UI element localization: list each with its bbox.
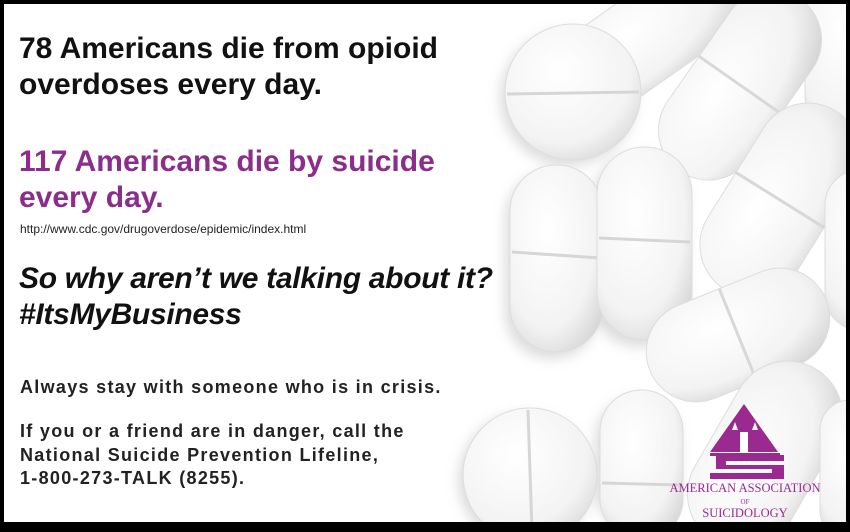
- vertical pill 1: [510, 165, 603, 352]
- pill behind logo: [667, 341, 850, 532]
- heading: opioid: 78 Americans die from opioid: [19, 32, 438, 65]
- round tablet top: [505, 24, 641, 160]
- pill diagonal middle: [680, 83, 850, 317]
- round tablet bottom: [463, 408, 597, 532]
- pill top: [546, 0, 754, 126]
- lifeline text: [20, 421, 405, 488]
- pill bottom diagonal: [631, 253, 845, 417]
- advice text: Always stay with someone who is in crisis.: [20, 377, 442, 397]
- source url: http://www.cdc.gov/drugoverdose/epidemic/index.html: [20, 222, 306, 236]
- question heading: [19, 262, 493, 331]
- vertical pill 2: [597, 147, 692, 340]
- heading: suicide: every day.: [19, 181, 164, 214]
- heading: opioid: overdoses every day.: [19, 68, 322, 101]
- vertical pill bottom: [600, 390, 683, 532]
- lifeline text: 1-800-273-TALK (8255).: [20, 468, 245, 488]
- logo: AAS: OF: [741, 498, 749, 506]
- pill right top: [805, 0, 850, 140]
- heading: suicide: 117 Americans die by suicide: [19, 145, 435, 178]
- heading: suicide: [19, 145, 435, 214]
- lifeline text: If you or a friend are in danger, call the: [20, 421, 405, 441]
- pill right edge: [825, 170, 850, 330]
- logo: AAS: [669, 404, 821, 518]
- question heading: So why aren’t we talking about it?: [19, 262, 493, 295]
- question heading: #ItsMyBusiness: [19, 298, 242, 331]
- logo: AAS: AMERICAN ASSOCIATION: [669, 481, 821, 495]
- pill diagonal upper: [639, 0, 841, 200]
- heading: opioid: [19, 32, 438, 101]
- white text panel: [4, 4, 450, 514]
- lifeline text: National Suicide Prevention Lifeline,: [20, 444, 379, 464]
